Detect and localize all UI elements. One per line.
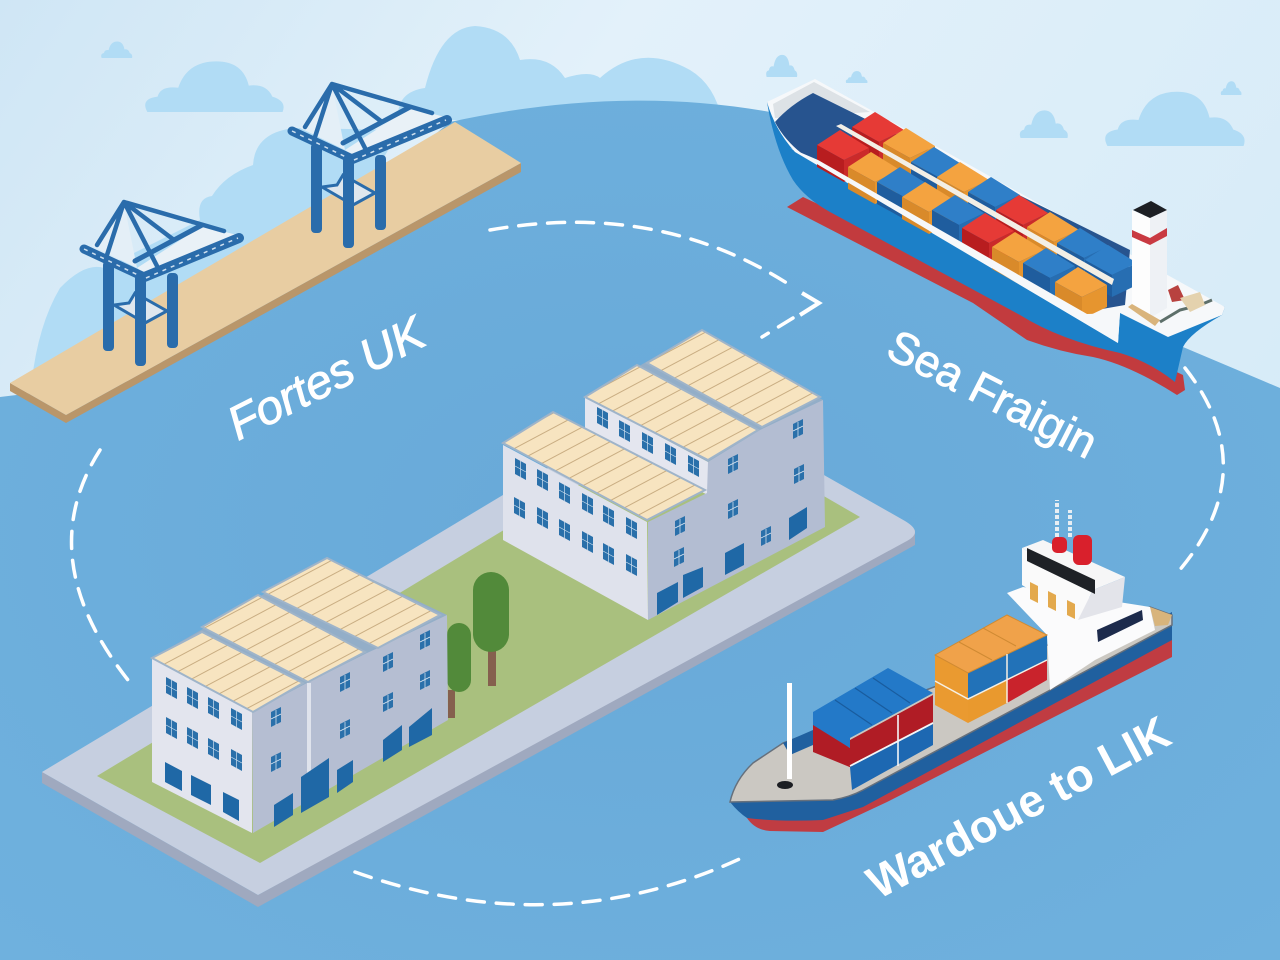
red keel: [787, 197, 1185, 395]
feeder ship: [730, 500, 1172, 832]
blue and red container stack: [813, 668, 933, 790]
route: top dashed arrow: [490, 222, 819, 337]
red tanks: [1052, 535, 1092, 565]
pier deck: [10, 122, 521, 423]
stern deck: [1150, 607, 1172, 626]
label: Sea Fraigin: Sea Fraigin: [879, 319, 1106, 468]
near white gunwale: [790, 148, 1120, 343]
route: left dashed arc: [72, 450, 132, 685]
warehouse: front: [152, 558, 448, 833]
roofs: [503, 330, 820, 520]
crane: right: [292, 84, 447, 248]
bow interior: [773, 82, 870, 118]
platform: [42, 391, 915, 907]
grass: [97, 418, 860, 863]
deck: [730, 607, 1172, 802]
label: Fortes UK: Fortes UK: [218, 304, 436, 450]
pier with cranes: [10, 84, 521, 423]
blue hull band: [730, 612, 1172, 821]
route: right dashed arc: [1178, 368, 1223, 572]
crane: left: [84, 202, 239, 366]
superstructure: [1007, 500, 1155, 690]
deck divider: [836, 124, 1114, 285]
antennas: [1057, 500, 1070, 537]
stern deck equipment: [1128, 285, 1212, 326]
roofs: [152, 558, 440, 712]
funnel: [1132, 201, 1167, 318]
doors: [165, 708, 432, 827]
navy sign: [1097, 610, 1143, 642]
clouds: [30, 26, 1245, 420]
yellow doors: [1030, 582, 1075, 619]
bow rail: [783, 730, 813, 755]
doors: [657, 507, 807, 615]
white deck: [767, 79, 1225, 343]
windows: [166, 630, 430, 772]
orange container stack: [935, 615, 1047, 723]
mast: [777, 683, 793, 789]
near row of containers: [817, 130, 1107, 319]
far row of containers: [852, 112, 1137, 297]
container ship: sea freight: [767, 79, 1225, 395]
cargo hold: [775, 93, 1130, 312]
route: bottom dashed arc: [355, 855, 748, 905]
warehouse site: [42, 330, 915, 907]
red lower hull: [747, 635, 1172, 832]
blue hull: [767, 102, 1225, 382]
label: Wardoue to LIK: Wardoue to LIK: [858, 706, 1178, 909]
tree: near: [447, 623, 471, 718]
warehouse: back: [503, 330, 825, 620]
tree: far: [473, 572, 509, 686]
windows: [514, 407, 804, 576]
